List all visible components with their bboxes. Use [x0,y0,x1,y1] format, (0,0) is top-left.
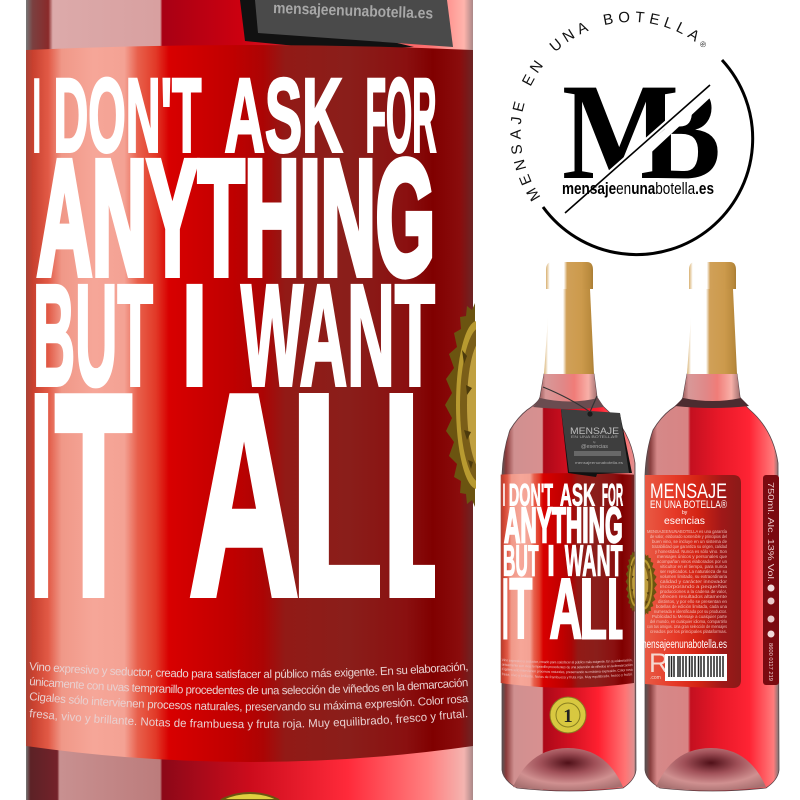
gold medal edge [634,554,657,615]
main slogan: A [189,335,299,655]
back label [634,475,741,688]
label slogan and text: T [509,562,532,657]
back label paragraph: con tus amigos. Una gran selección de mensajes [647,624,728,629]
large bottle close-up [26,0,476,800]
brand logo [510,12,754,256]
label slogan and text: ANYTHING [504,499,623,553]
MB monogram [564,84,718,214]
base dome [656,748,766,790]
neck glass [683,374,740,402]
wine description [30,662,468,730]
R mark: .com [650,675,661,681]
back label paragraph: del mundo, en cualquier idioma, compartirlo [650,619,727,624]
MB monogram: B [640,55,721,208]
logo web address: mensajeenunabotella.es [562,179,714,198]
label slogan and text: BUT [503,537,539,586]
main slogan: I [32,55,42,177]
main slogan: WANT [241,255,435,416]
label slogan and text: únicamente con uvas tempranillo procedentes de una selección de viñedos en la demarcación [502,663,632,669]
MB monogram: M [562,55,679,208]
bottle glass, top and bottom of close-up [26,0,473,800]
label slogan and text: L [578,558,616,658]
wine description: únicamente con uvas tempranillo procedentes de una selección de viñedos en la demarcación [30,676,468,696]
main slogan [34,76,437,598]
main slogan: L [378,329,478,662]
main slogan: T [55,335,132,655]
label slogan and text: Cigales sólo intervienen procesos naturales, preservando su máxima expresión. Color rosa [502,668,633,674]
back label paragraph: de valor, elaborado sostenible y principios del [650,534,727,539]
back label brand: esencias [664,516,705,527]
label slogan and text: fresa, vivo y brillante. Notas de frambuesa y fruta roja. Muy equilibrado, fresco y frutal. [502,672,632,680]
hang tag: mensajeenunabotella.es [575,461,623,465]
hang tag: EN UNA BOTELLA® [571,434,618,439]
back label paragraph: botellas de edición limitada, cada una [656,604,728,609]
hanging black tag, close-up [240,0,453,58]
main slogan: BUT [33,255,153,416]
back label paragraph: mensajes únicos y personales que [657,554,728,559]
base dome [513,748,623,790]
label slogan and text: FOR [602,477,623,512]
gold capsule [544,289,594,374]
back label paragraph: y honestidad. Nunca es sólo vino. Son [655,549,728,554]
label slogan and text: Vino expresivo y seductor, creado para satisfacer al público más exigente. En su elaboración, [502,658,632,664]
label slogan and text: ASK [560,477,595,512]
back label brand: EN UNA BOTELLA® [650,499,727,511]
label slogan and text: I [501,558,509,658]
hang tag: MENSAJE [570,426,619,437]
neck glass [540,374,597,402]
back label paragraph: MENSAJEENUNABOTELLA es una garantía [647,529,728,534]
circular brand text: MENSAJE EN UNA BOTELLA® [510,12,706,202]
side legal strip [763,475,779,685]
hang tag: by [593,441,596,444]
gold medal, bottom edge of close-up [221,793,279,800]
red front label [501,473,634,688]
bottle glass [502,374,636,791]
wine description: fresa, vivo y brillante. Notas de frambuesa y fruta roja. Muy equilibrado, fresco y frutal. [30,709,468,730]
label slogan and text: WANT [565,537,623,586]
back label paragraph: acompañan vinos elaborados por un [657,559,728,564]
back label paragraph: creados por los principales plataformas. [650,629,727,634]
gold medal: 1 [563,706,573,727]
red front label, close-up [26,45,473,762]
gold medal wrapping round label edge [445,303,502,507]
R mark: R [649,648,668,678]
back label paragraph: producciones a la cadena de valor, [660,589,727,594]
side legal strip: 8600 0117 219 [767,643,773,681]
wine description: Cigales sólo intervienen procesos naturales, preservando su máxima expresión. Color rosa [30,692,468,713]
label slogan and text: I [547,537,555,586]
back label web address: mensajeenunabotella.es [640,639,727,651]
capsule lip [546,262,593,289]
hang tag string [543,387,597,412]
main slogan: I [28,329,54,662]
barcode [665,654,727,681]
gold capsule [687,289,737,374]
bottle glass [645,374,779,791]
back label paragraph: trazabilidad que garantiza su origen, calidad [652,544,727,549]
main slogan: I [182,255,208,416]
gold medal [550,697,586,733]
back label paragraph: numerada e identificada por su productor. [654,609,727,614]
back label paragraph: ofrecen resultados altamente [660,594,728,599]
wine description: Vino expresivo y seductor, creado para satisfacer al público más exigente. En su elaboración, [30,662,468,680]
back label paragraph [647,529,728,634]
hanging black tag, close-up: mensajeenunabotella.es [273,0,433,23]
back label paragraph: volumen limitado, su extraordinaria [660,574,728,579]
logo ring [543,60,753,255]
label slogan and text: DON'T [509,477,553,512]
neck shadow [675,398,749,408]
main slogan: DON'T [54,58,202,174]
back label paragraph: Publicidad tu Mensaje a cualquier parte [652,614,728,619]
neck shadow [533,398,604,409]
back label brand [650,480,727,527]
hang tag: @esencias [581,444,609,450]
back label paragraph: calidad y carácter innovador [660,579,728,584]
back label paragraph: buen vino, se incluye en un sistema de [652,539,728,544]
label slogan and text: A [549,562,582,657]
side legal strip: 750ml. Alc. 13% Vol. [766,482,775,582]
label slogan and text: I [502,476,505,513]
main slogan: L [285,329,412,662]
main slogan: ASK [224,58,342,174]
label slogan and text [501,476,635,680]
label slogan and text: L [606,558,636,658]
front bottle [500,262,636,792]
back label paragraph: distintos, y por ello se presentan en [658,599,728,604]
back label paragraph: incorporando a pequeñas [660,584,728,589]
back label brand: by [682,510,688,516]
capsule lip [689,262,736,289]
hang tag [561,409,632,477]
back label paragraph: viticultor en el tiempo, para nunca [660,564,728,569]
back label brand: MENSAJE [650,480,727,503]
back label paragraph: ser replicados. La naturaleza de su [660,569,728,574]
back bottle [634,262,779,791]
main slogan: FOR [366,58,436,174]
